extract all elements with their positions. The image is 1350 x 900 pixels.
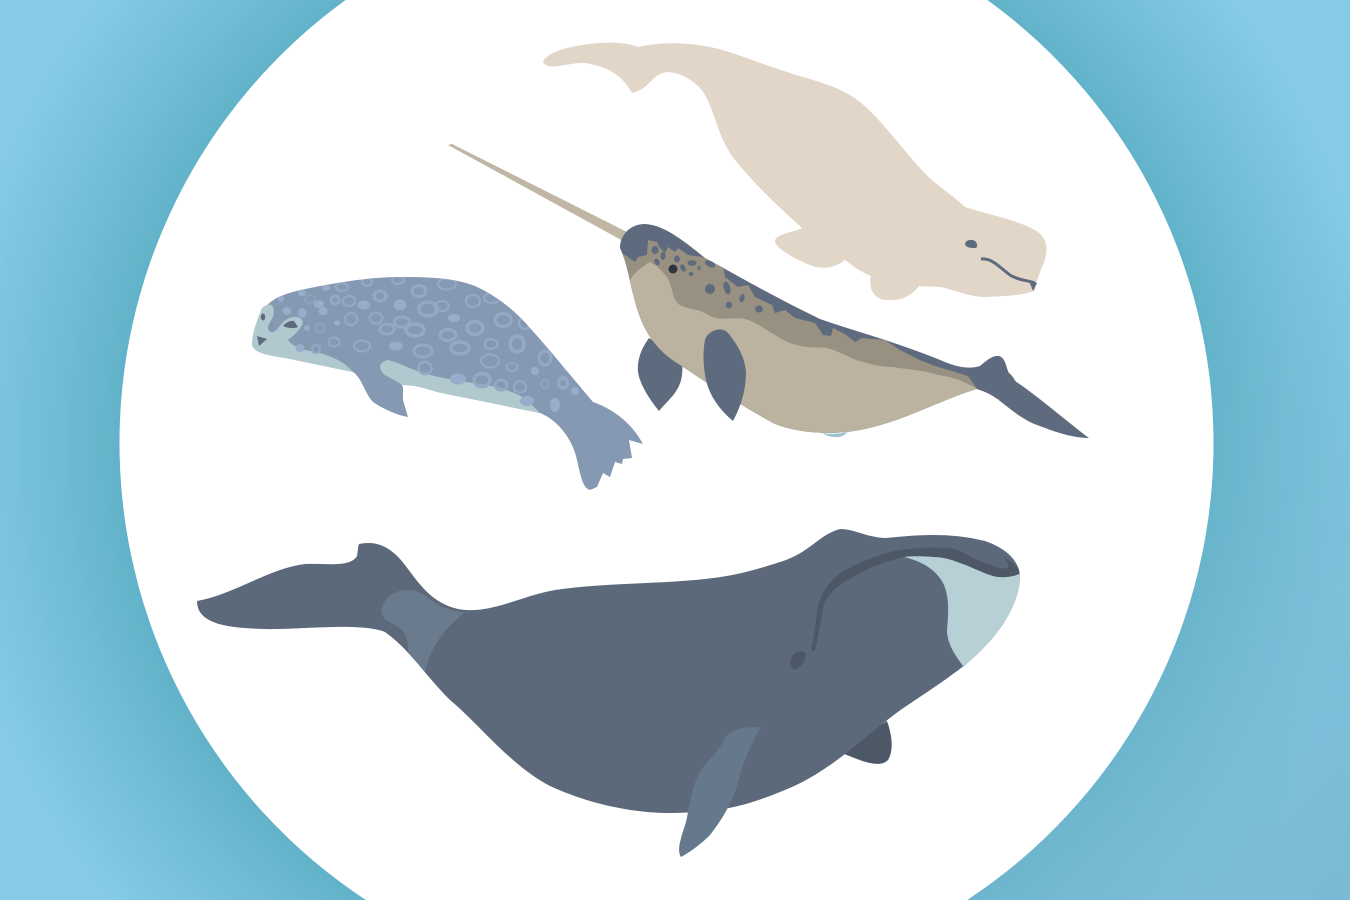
narwhal body: [620, 224, 1089, 438]
narwhal rear flipper: [638, 338, 682, 411]
bowhead whale: [197, 529, 1030, 857]
seal belly patch: [380, 360, 540, 413]
bowhead mouth line: [811, 548, 1022, 651]
seal eye: [283, 321, 298, 328]
seal body: [252, 277, 643, 490]
bowhead chin patch: [904, 555, 1030, 666]
bowhead tail patch: [381, 590, 465, 672]
bowhead eye: [791, 651, 806, 670]
narwhal eye: [668, 264, 678, 274]
narwhal: [448, 144, 1089, 450]
ringed seal: [252, 276, 643, 490]
narwhal front flipper: [704, 329, 746, 421]
bowhead flipper: [679, 727, 761, 857]
narwhal tusk: [448, 144, 631, 242]
bowhead body: [197, 529, 1020, 813]
beluga mouth: [981, 259, 1035, 283]
seal face and chest patch: [252, 305, 353, 372]
seal spots: [278, 276, 579, 412]
narwhal belly: [630, 262, 1000, 433]
narwhal mid flank: [615, 240, 978, 395]
seal ear: [261, 314, 265, 320]
seal nose: [257, 336, 267, 346]
beluga whale: [543, 43, 1046, 300]
beluga eye: [965, 240, 977, 248]
bowhead far flipper: [840, 721, 892, 764]
narwhal underside sliver: [822, 432, 848, 437]
narwhal spots: [652, 246, 763, 312]
